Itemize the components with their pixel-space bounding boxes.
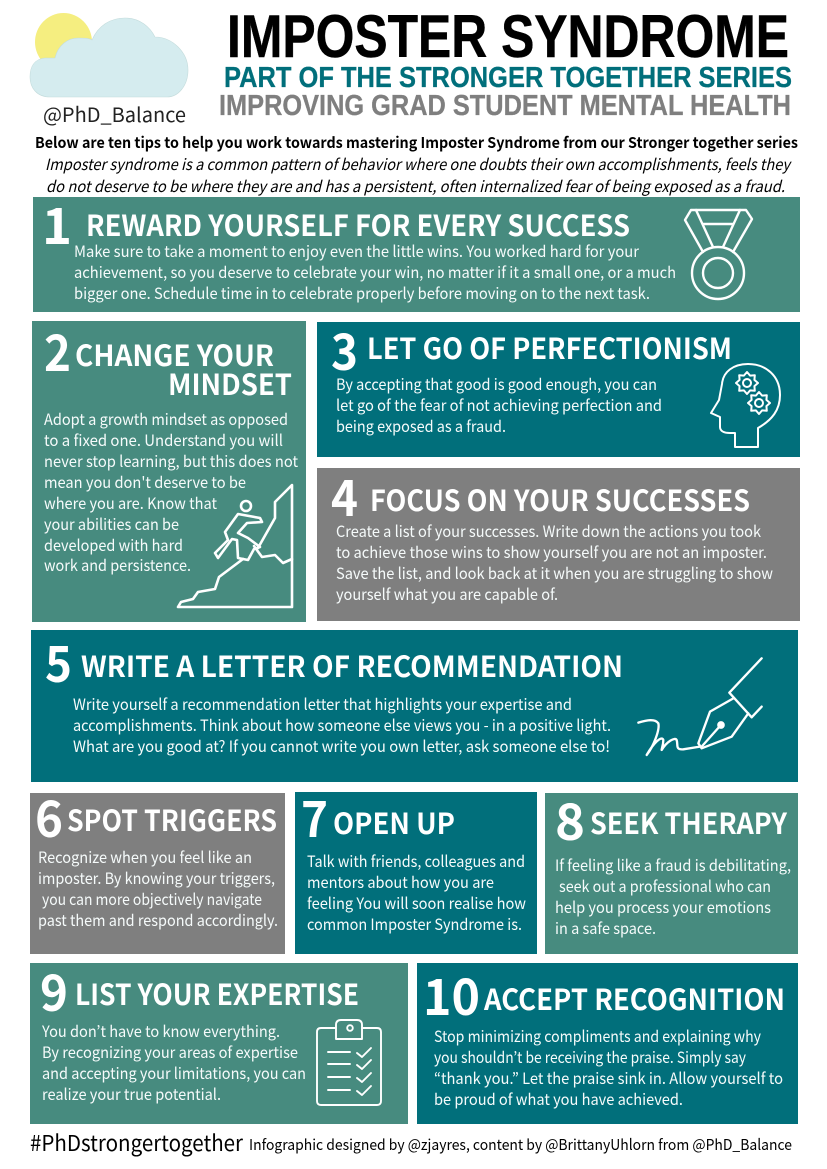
number 4: 4 [331,459,358,531]
body 2: mean you don't deserve to be [44,471,246,493]
body 2: developed with hard [44,534,183,556]
body 2: Adopt a growth mindset as opposed [44,408,288,430]
panel 3: let go of perfectionism [317,313,800,457]
body 1: achievement, so you deserve to celebrate your win, no matter if it a small one, or a much [74,261,676,283]
intro text: do not deserve to be where they are and has a persistent, often internalized fear of being exposed as a fraud. [46,175,785,197]
body 6 [38,846,278,931]
body 6: you can more objectively navigate [42,888,262,910]
heading 2: MINDSET [168,362,292,404]
intro text: Below are ten tips to help you work towards mastering Imposter Syndrome from our Stronger together series [35,132,798,153]
icon: fountain pen signature [638,658,762,755]
number 9: 9 [40,954,68,1026]
footer credits: Infographic designed by @zjayres, content by @BrittanyUhlorn from @PhD_Balance [249,1134,792,1155]
body 5: Write yourself a recommendation letter that highlights your expertise and [73,693,572,715]
panel 1: reward yourself [33,187,800,312]
intro text [35,132,798,197]
body 10 [434,1025,783,1110]
body 9: By recognizing your areas of expertise [42,1041,298,1063]
body 8: If feeling like a fraud is debilitating, [555,854,791,876]
body 2: never stop learning, but this does not [44,450,298,472]
body 5: What are you good at? If you cannot write you own letter, ask someone else to! [73,735,610,757]
heading 3: LET GO OF PERFECTIONISM [367,326,732,368]
panel 5: write a letter of recommendation [31,625,798,782]
panel 4: focus on your successes [317,459,800,621]
heading 10: ACCEPT RECOGNITION [483,977,785,1019]
heading 4: FOCUS ON YOUR SUCCESSES [370,478,750,520]
number 6: 6 [35,780,63,852]
body 4: to achieve those wins to show yourself you are not an imposter. [336,541,767,563]
body 8: help you process your emotions [555,896,771,918]
footer hashtag: #PhDstrongertogether [30,1126,243,1158]
body 2: work and persistence. [44,554,191,576]
heading 7: OPEN UP [333,801,455,843]
heading 6: SPOT TRIGGERS [67,798,277,840]
heading 8: SEEK THERAPY [590,801,788,843]
body 6: Recognize when you feel like an [38,846,252,868]
body 4 [336,520,774,605]
body 10: you shouldn’t be receiving the praise. Simply say [434,1046,746,1068]
panel 7: open up [295,780,537,954]
icon: head with gears [711,364,780,447]
body 7: mentors about how you are [307,871,494,893]
body 7: feeling You will soon realise how [307,892,527,914]
number 3: 3 [331,313,358,385]
body 2: your abilities can be [44,513,179,535]
handle: @PhD_Balance [43,99,186,128]
panel 8: seek therapy [545,783,798,954]
body 9: realize your true potential. [42,1083,221,1105]
number 10: 10 [423,958,480,1030]
number 5: 5 [45,625,72,697]
body 1: Make sure to take a moment to enjoy even the little wins. You worked hard for your [74,240,640,262]
body 8: in a safe space. [555,917,656,939]
panel 9: list your expertise [30,954,408,1124]
icon: mountain climber [178,485,292,607]
body 5 [73,693,611,757]
heading 2 [75,333,292,404]
panel 10: accept recognition [417,958,798,1124]
heading 9: LIST YOUR EXPERTISE [75,972,359,1014]
body 10: Stop minimizing compliments and explaining why [434,1025,761,1047]
heading 1: REWARD YOURSELF FOR EVERY SUCCESS [86,203,630,245]
body 2 [44,408,298,576]
body 4: Create a list of your successes. Write down the actions you took [336,520,761,542]
body 8 [555,854,791,939]
body 10: “thank you.” Let the praise sink in. Allow yourself to [434,1067,783,1089]
body 3: let go of the fear of not achieving perfection and [336,394,662,416]
logo: sun and cloud [30,13,188,97]
number 8: 8 [555,783,585,855]
body 7: Talk with friends, colleagues and [307,850,525,872]
body 7 [307,850,527,935]
panel 2: change your mindset [32,314,306,622]
body 10: be proud of what you have achieved. [434,1088,683,1110]
panel 6: spot triggers [30,780,285,954]
body 5: accomplishments. Think about how someone else views you - in a positive light. [73,714,611,736]
body 8: seek out a professional who can [559,875,771,897]
number 1: 1 [42,187,72,259]
body 9: and accepting your limitations, you can [42,1062,306,1084]
number 2: 2 [44,314,71,386]
body 7: common Imposter Syndrome is. [307,913,522,935]
body 3: being exposed as a fraud. [336,415,506,437]
number 7: 7 [301,780,328,852]
body 1: bigger one. Schedule time in to celebrate properly before moving on to the next task. [74,282,650,304]
icon: clipboard checklist [317,1020,381,1105]
body 4: yourself what you are capable of. [336,583,558,605]
body 3 [336,373,662,437]
body 6: past them and respond accordingly. [38,909,278,931]
heading 5: WRITE A LETTER OF RECOMMENDATION [81,644,623,686]
body 3: By accepting that good is good enough, you can [336,373,657,395]
body 1 [74,240,676,304]
body 6: imposter. By knowing your triggers, [38,867,275,889]
heading 2: CHANGE YOUR [75,333,274,375]
body 9 [41,1020,306,1105]
body 9: You don’t have to know everything. [41,1020,280,1042]
body 2: to a fixed one. Understand you will [44,429,283,451]
intro text: Imposter syndrome is a common pattern of behavior where one doubts their own accomplishments, feels they [45,153,792,175]
icon: medal [685,210,752,299]
body 4: Save the list, and look back at it when you are struggling to show [336,562,774,584]
body 2: where you are. Know that [44,492,217,514]
